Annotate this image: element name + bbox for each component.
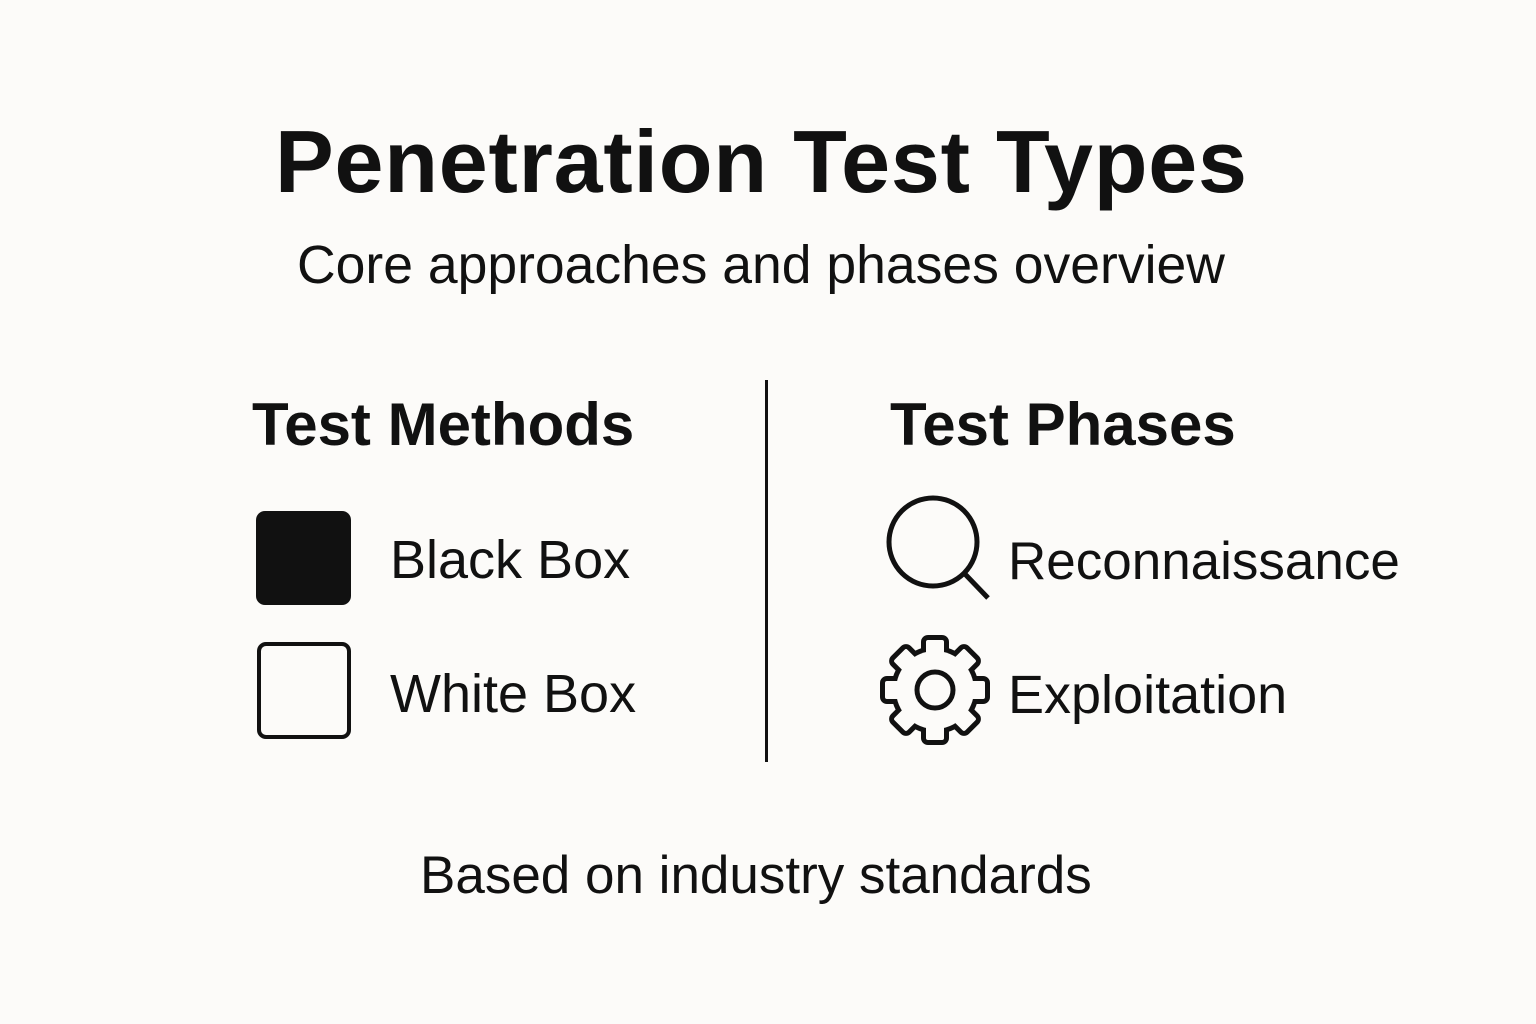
icon: black box — [256, 511, 351, 605]
divider — [765, 380, 768, 762]
label: white box: White Box — [390, 664, 636, 724]
panel: test phases — [880, 391, 1400, 745]
footer note: Based on industry standards — [420, 846, 1092, 905]
icon: magnifier — [886, 496, 990, 600]
panel: test methods — [252, 391, 636, 739]
label: black box: Black Box — [390, 530, 630, 590]
icon: white box — [257, 642, 351, 739]
heading: test methods: Test Methods — [252, 391, 634, 458]
label: exploitation: Exploitation — [1008, 665, 1287, 725]
icon: gear — [880, 635, 990, 745]
title: Penetration Test Types — [275, 112, 1248, 211]
heading: test phases: Test Phases — [890, 391, 1236, 458]
subtitle: Core approaches and phases overview — [297, 236, 1225, 295]
label: reconnaissance: Reconnaissance — [1008, 532, 1400, 591]
